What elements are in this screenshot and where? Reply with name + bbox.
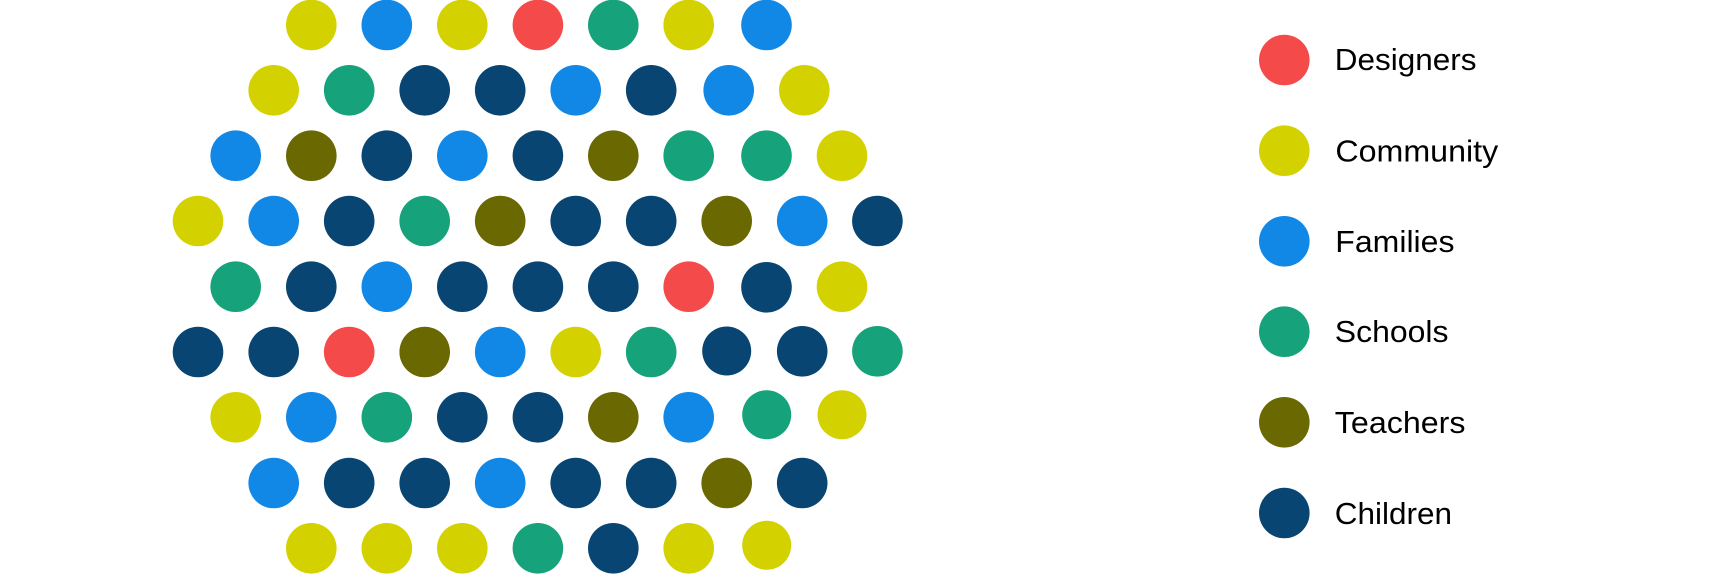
- dot row 8: [248, 458, 827, 508]
- dot row 7: [210, 390, 866, 443]
- legend item: Children: Children: [1335, 496, 1452, 531]
- dot row 5: [210, 261, 867, 313]
- dot row 3: [210, 130, 867, 181]
- legend item: Teachers: [1259, 397, 1466, 448]
- legend item: Community: Community: [1335, 134, 1499, 168]
- legend: [1259, 35, 1499, 538]
- dot row 1: [286, 0, 792, 50]
- dot row 4: [173, 196, 903, 246]
- legend item: Community: [1259, 125, 1499, 176]
- legend item: Families: [1259, 216, 1454, 267]
- dot row 6: [173, 326, 903, 377]
- legend item: Teachers: Teachers: [1335, 405, 1466, 440]
- legend item: Schools: [1259, 306, 1448, 357]
- hexagonal dot chart: [173, 0, 903, 574]
- legend item: Designers: [1259, 35, 1476, 85]
- dot row 2: [248, 65, 830, 116]
- legend item: Schools: Schools: [1335, 314, 1448, 349]
- legend item: Designers: Designers: [1335, 42, 1476, 77]
- legend item: Children: [1259, 488, 1452, 538]
- legend item: Families: Families: [1335, 224, 1454, 259]
- dot row 9: [286, 521, 791, 574]
